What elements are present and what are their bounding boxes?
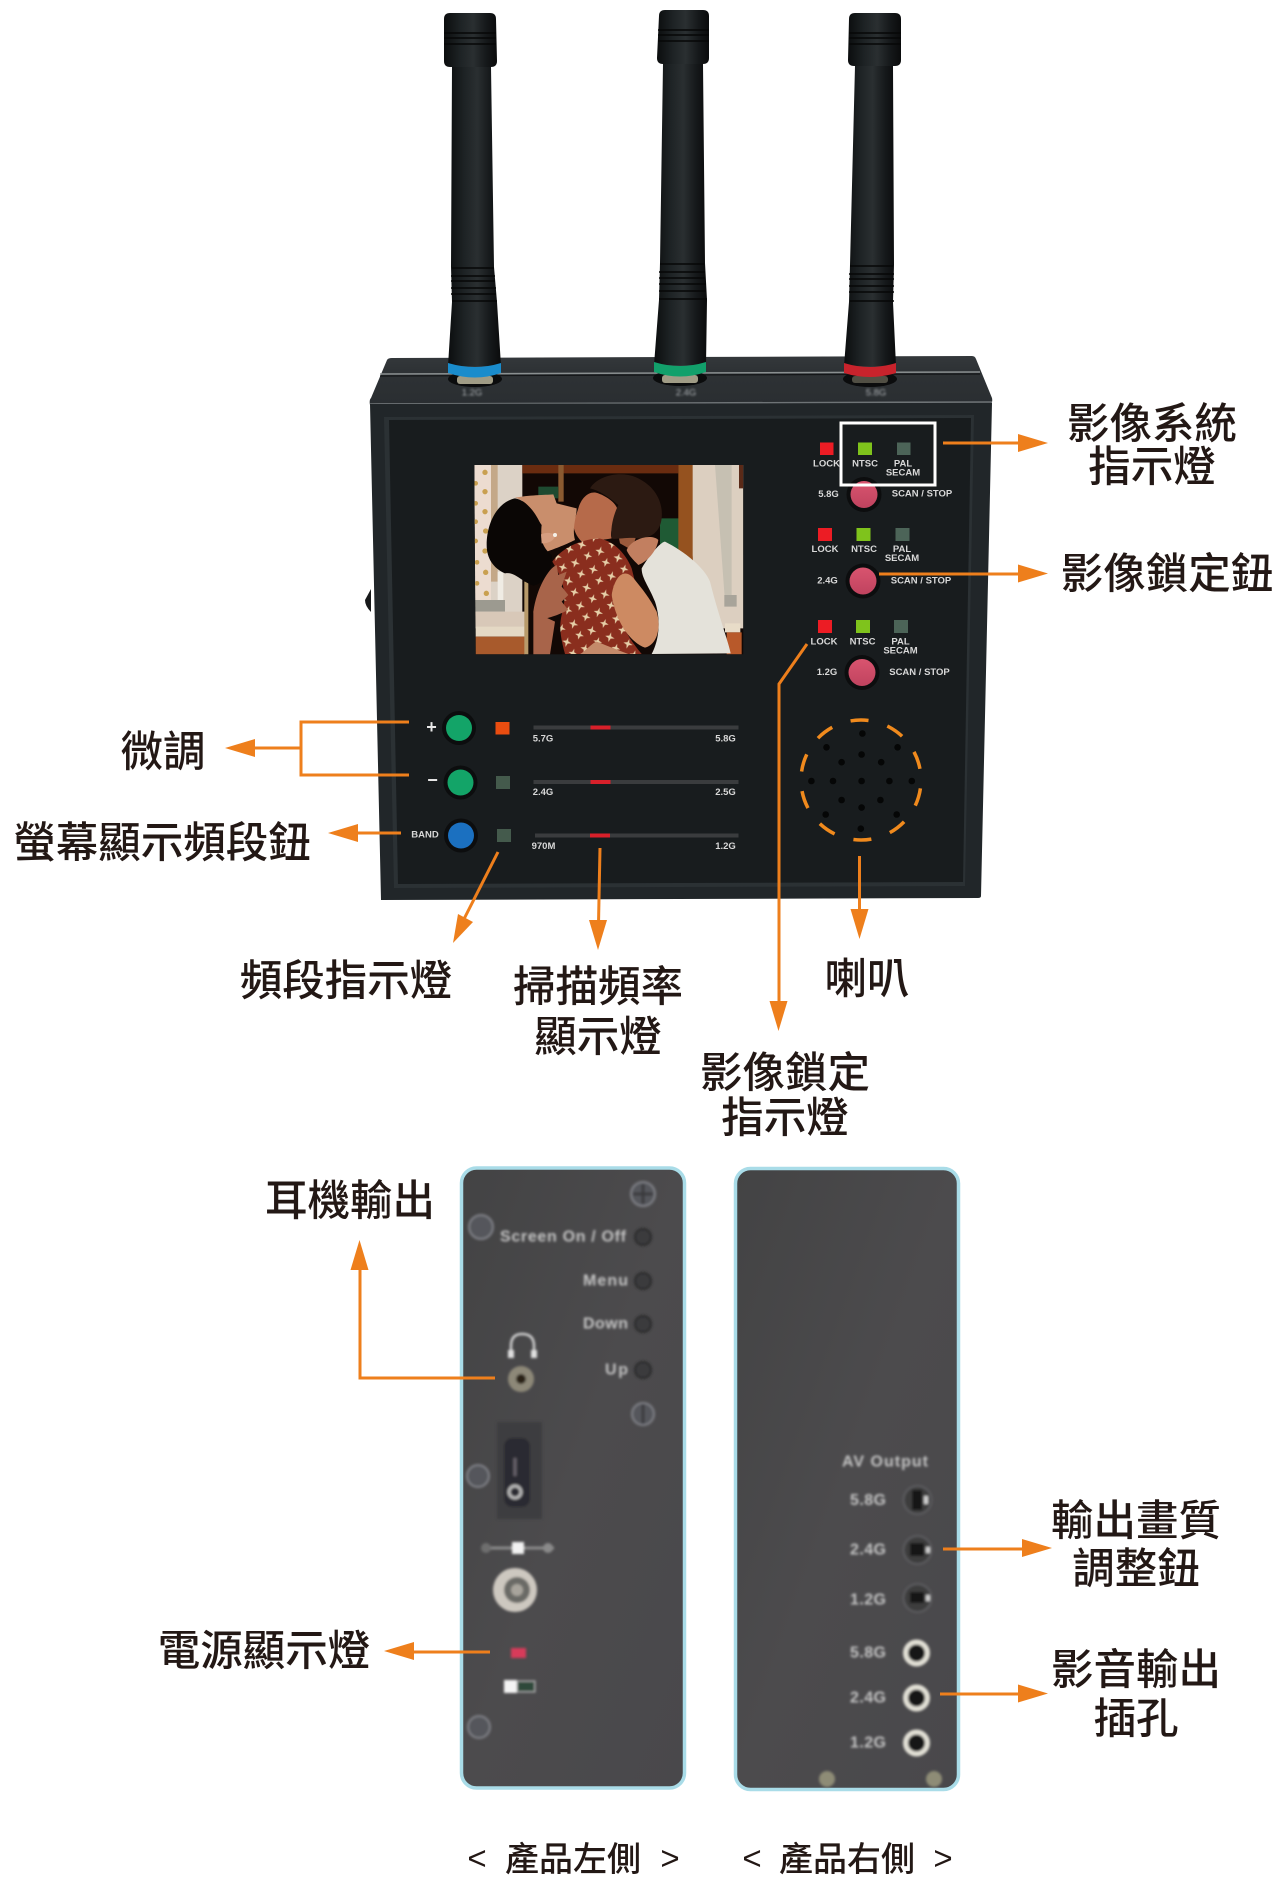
arrow: video lock button	[879, 564, 1048, 582]
indicator group: 2.4G: LOCK	[812, 544, 839, 555]
label: AV output jack	[1051, 1648, 1221, 1744]
antenna port labels: 5.8G	[866, 388, 886, 398]
indicator group: 1.2G: 1.2G	[817, 667, 837, 678]
left side blurred details	[467, 1182, 655, 1738]
label: band indicator: 頻段指示燈	[240, 958, 452, 1006]
dress	[552, 538, 642, 654]
frequency scan bars	[532, 726, 738, 852]
indicator group: 2.4G: SECAM	[885, 553, 919, 564]
caption: product right side	[742, 1840, 953, 1879]
indicator group: 5.8G: 5.8G	[818, 489, 839, 500]
arrow: AV output jack	[940, 1684, 1048, 1702]
caption: product right side: >	[933, 1840, 953, 1876]
caption: product left side: 產品左側	[505, 1841, 641, 1879]
indicator group: 1.2G	[811, 620, 950, 690]
label: AV output jack: 影音輸出	[1051, 1648, 1221, 1694]
right side blurred details: 1.2G	[850, 1734, 886, 1752]
arrow: band indicator	[453, 852, 498, 943]
antenna port labels	[462, 388, 886, 398]
arrow: video lock indicator	[770, 644, 807, 1031]
frequency scan bars: 1.2G	[715, 841, 736, 852]
video screen photo	[472, 463, 748, 657]
antenna: 5.8G red	[843, 13, 901, 387]
arrow: speaker	[850, 856, 868, 939]
indicator group: 1.2G: LOCK	[811, 636, 838, 648]
top face	[370, 356, 992, 405]
highlight box: video system indicators	[841, 423, 935, 485]
speaker holes	[808, 730, 915, 832]
label: output quality knob: 調整鈕	[1072, 1546, 1200, 1594]
indicator group: 2.4G	[812, 528, 952, 598]
indicator group: 5.8G: NTSC	[852, 458, 878, 470]
left side blurred details: Up	[605, 1362, 628, 1378]
antenna: 2.4G green	[653, 10, 709, 386]
woman hair	[487, 498, 552, 586]
indicator group: 2.4G: PAL	[893, 544, 911, 555]
band indicator LEDs	[496, 722, 511, 842]
panel: left side of product	[462, 1168, 684, 1788]
label: power indicator: 電源顯示燈	[158, 1628, 370, 1676]
right side blurred details	[819, 1454, 942, 1787]
arrow: headphone output	[350, 1240, 495, 1378]
lower hand	[580, 642, 628, 654]
right side blurred details: 2.4G	[850, 1690, 886, 1706]
label: headphone output: 耳機輸出	[265, 1178, 435, 1226]
front face	[370, 403, 992, 900]
label: video system indicator: 影像系統	[1067, 402, 1237, 448]
caption: product right side: <	[742, 1840, 762, 1876]
label: scan frequency display: 掃描頻率	[513, 964, 683, 1012]
control buttons: +	[426, 717, 437, 737]
arrow: video system indicator	[943, 434, 1048, 452]
label: video lock indicator: 指示燈	[721, 1096, 849, 1142]
label: AV output jack: 插孔	[1093, 1696, 1179, 1744]
man hand on back	[533, 565, 568, 618]
indicator group: 5.8G: SCAN / STOP	[892, 488, 953, 500]
man forearm	[533, 612, 555, 654]
man neck	[619, 538, 636, 548]
man face	[573, 492, 618, 542]
label: output quality knob: 輸出畫質	[1051, 1498, 1221, 1546]
indicator group: 5.8G	[813, 442, 953, 512]
man hand at neck	[627, 537, 658, 565]
indicator group: 5.8G: SECAM	[886, 468, 920, 478]
antenna port labels: 2.4G	[676, 388, 696, 398]
caption: product right side: 產品右側	[779, 1841, 915, 1879]
label: scan frequency display	[513, 964, 683, 1062]
man shirt	[642, 542, 731, 654]
indicator group: 2.4G: SCAN / STOP	[891, 576, 952, 586]
front inner panel	[389, 418, 971, 884]
indicator group: 1.2G: PAL	[891, 636, 910, 648]
indicator group: 2.4G: 2.4G	[817, 576, 838, 586]
label: video lock button: 影像鎖定鈕	[1061, 552, 1273, 598]
man hair	[590, 474, 662, 539]
label: video lock indicator: 影像鎖定	[700, 1050, 870, 1098]
label: video system indicator: 指示燈	[1088, 444, 1216, 492]
panel: right side of product	[736, 1168, 958, 1790]
device body	[365, 356, 992, 900]
frequency scan bars: 970M	[532, 841, 555, 852]
indicator group: 1.2G: SECAM	[883, 646, 918, 656]
label: scan frequency display: 顯示燈	[534, 1014, 662, 1062]
woman arm	[612, 574, 659, 648]
left side blurred details: Menu	[583, 1272, 628, 1290]
label: video system indicator	[1067, 402, 1237, 492]
antenna port labels: 1.2G	[462, 388, 482, 398]
frequency scan bars: 5.8G	[715, 734, 736, 744]
label: video lock indicator	[700, 1050, 870, 1142]
indicator group: 2.4G: NTSC	[851, 544, 877, 555]
right side blurred details: AV Output	[842, 1454, 929, 1470]
caption: product left side	[467, 1840, 680, 1879]
indicator group: 5.8G: PAL	[894, 458, 912, 470]
woman face	[515, 494, 577, 552]
right side blurred details: 2.4G	[850, 1542, 886, 1558]
speaker dashed outline	[791, 710, 931, 850]
frequency scan bars: 2.4G	[533, 787, 553, 798]
indicator group: 1.2G: NTSC	[850, 636, 876, 648]
indicator group: 1.2G: SCAN / STOP	[889, 667, 950, 678]
label: band button: 螢幕顯示頻段鈕	[13, 820, 311, 868]
label: output quality knob	[1051, 1498, 1221, 1594]
arrow: output quality knob	[943, 1539, 1052, 1557]
indicator group: 5.8G: LOCK	[813, 458, 840, 470]
frequency scan bars: 5.7G	[533, 734, 553, 744]
left side blurred details: Screen On / Off	[500, 1228, 627, 1246]
front inner bevel	[384, 415, 974, 888]
caption: product left side: >	[660, 1840, 680, 1876]
arrow: scan frequency	[589, 848, 607, 950]
antenna: 1.2G blue	[444, 13, 502, 387]
arrow: power indicator	[384, 1642, 490, 1660]
control buttons: BAND	[411, 830, 439, 840]
right side blurred details: 5.8G	[850, 1492, 886, 1509]
label: speaker: 喇叭	[824, 956, 910, 1004]
control buttons	[411, 711, 478, 852]
frequency scan bars: 2.5G	[715, 787, 736, 798]
caption: product left side: <	[467, 1840, 487, 1876]
left side blurred details: Down	[583, 1316, 628, 1332]
arrow: band button	[328, 824, 401, 842]
arrow: fine tune bracket	[225, 722, 409, 775]
right side blurred details: 5.8G	[850, 1644, 886, 1662]
right side blurred details: 1.2G	[850, 1592, 886, 1608]
control buttons: −	[427, 770, 438, 790]
side knob	[365, 589, 371, 612]
label: fine tune: 微調	[120, 730, 206, 776]
